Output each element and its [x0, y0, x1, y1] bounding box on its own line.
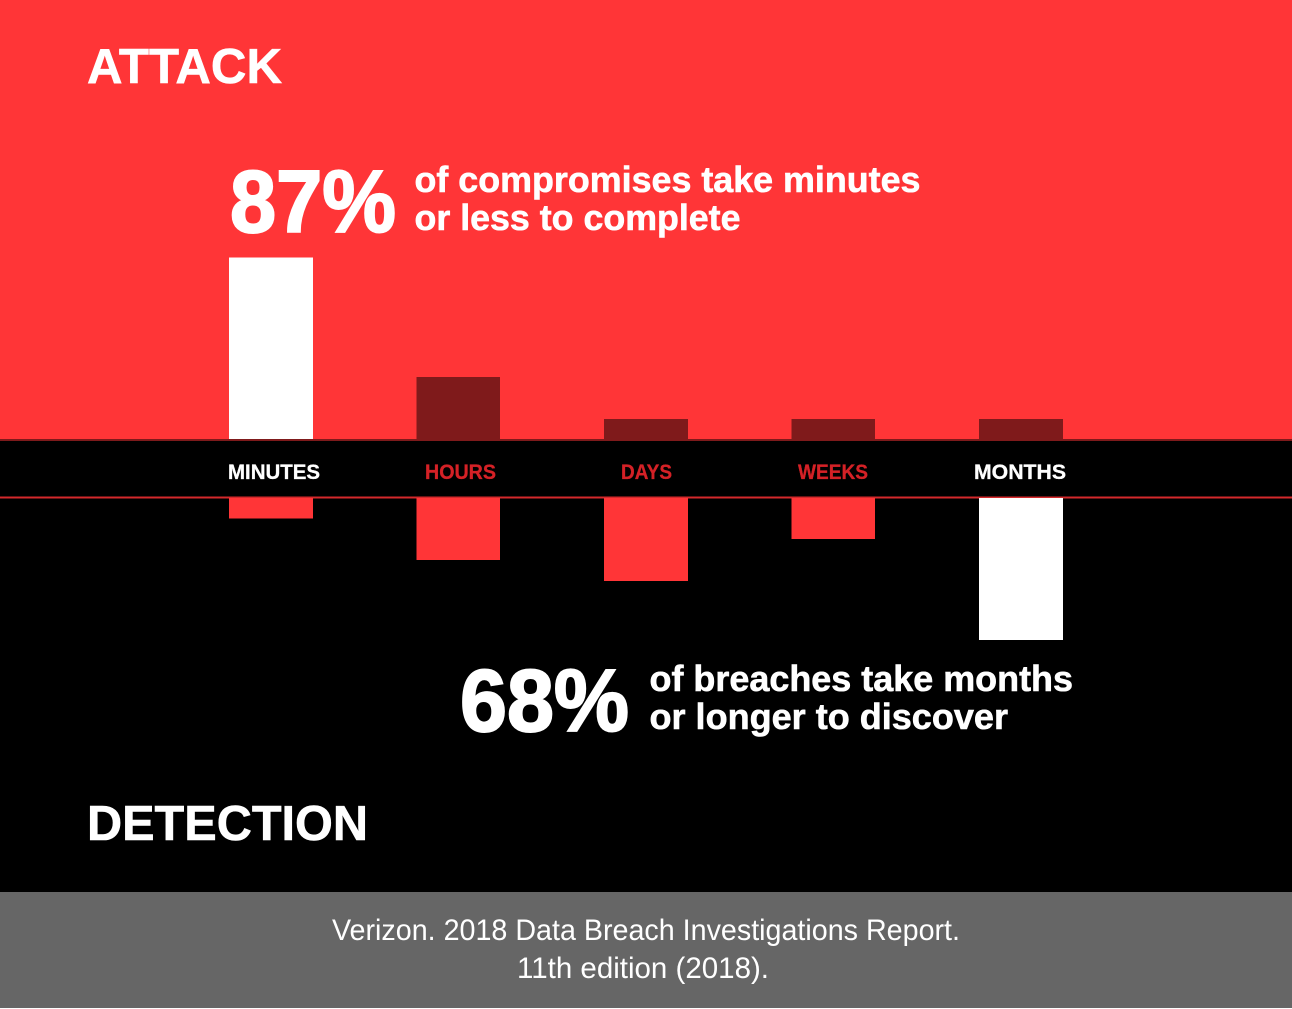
callout: 87%: or less to complete: [414, 197, 740, 238]
time axis labels: HOURS: [425, 461, 496, 484]
callout: 87%: [230, 152, 920, 251]
callout: 68%: or longer to discover: [650, 696, 1008, 737]
heading: attack: ATTACK: [87, 40, 282, 94]
time axis labels: MONTHS: [974, 461, 1066, 484]
footer: source: Verizon. 2018 Data Breach Investigations Report.: [332, 914, 960, 947]
time axis labels: DAYS: [621, 461, 672, 484]
bar chart: attack: [229, 258, 1063, 440]
time axis labels: MINUTES: [228, 461, 320, 484]
callout: 87%: 87%: [230, 152, 396, 251]
heading: detection: DETECTION: [87, 797, 368, 851]
footer: source: 11th edition (2018).: [517, 952, 769, 985]
time axis labels: WEEKS: [798, 461, 868, 484]
callout: 68%: [460, 651, 1073, 750]
callout: 68%: of breaches take months: [650, 658, 1073, 699]
callout: 87%: of compromises take minutes: [414, 159, 920, 200]
callout: 68%: 68%: [460, 651, 629, 750]
bar chart: detection: [229, 498, 1063, 640]
time axis labels: [228, 461, 1066, 484]
footer: source: [0, 892, 1292, 1008]
axis band lines: [0, 439, 1292, 498]
